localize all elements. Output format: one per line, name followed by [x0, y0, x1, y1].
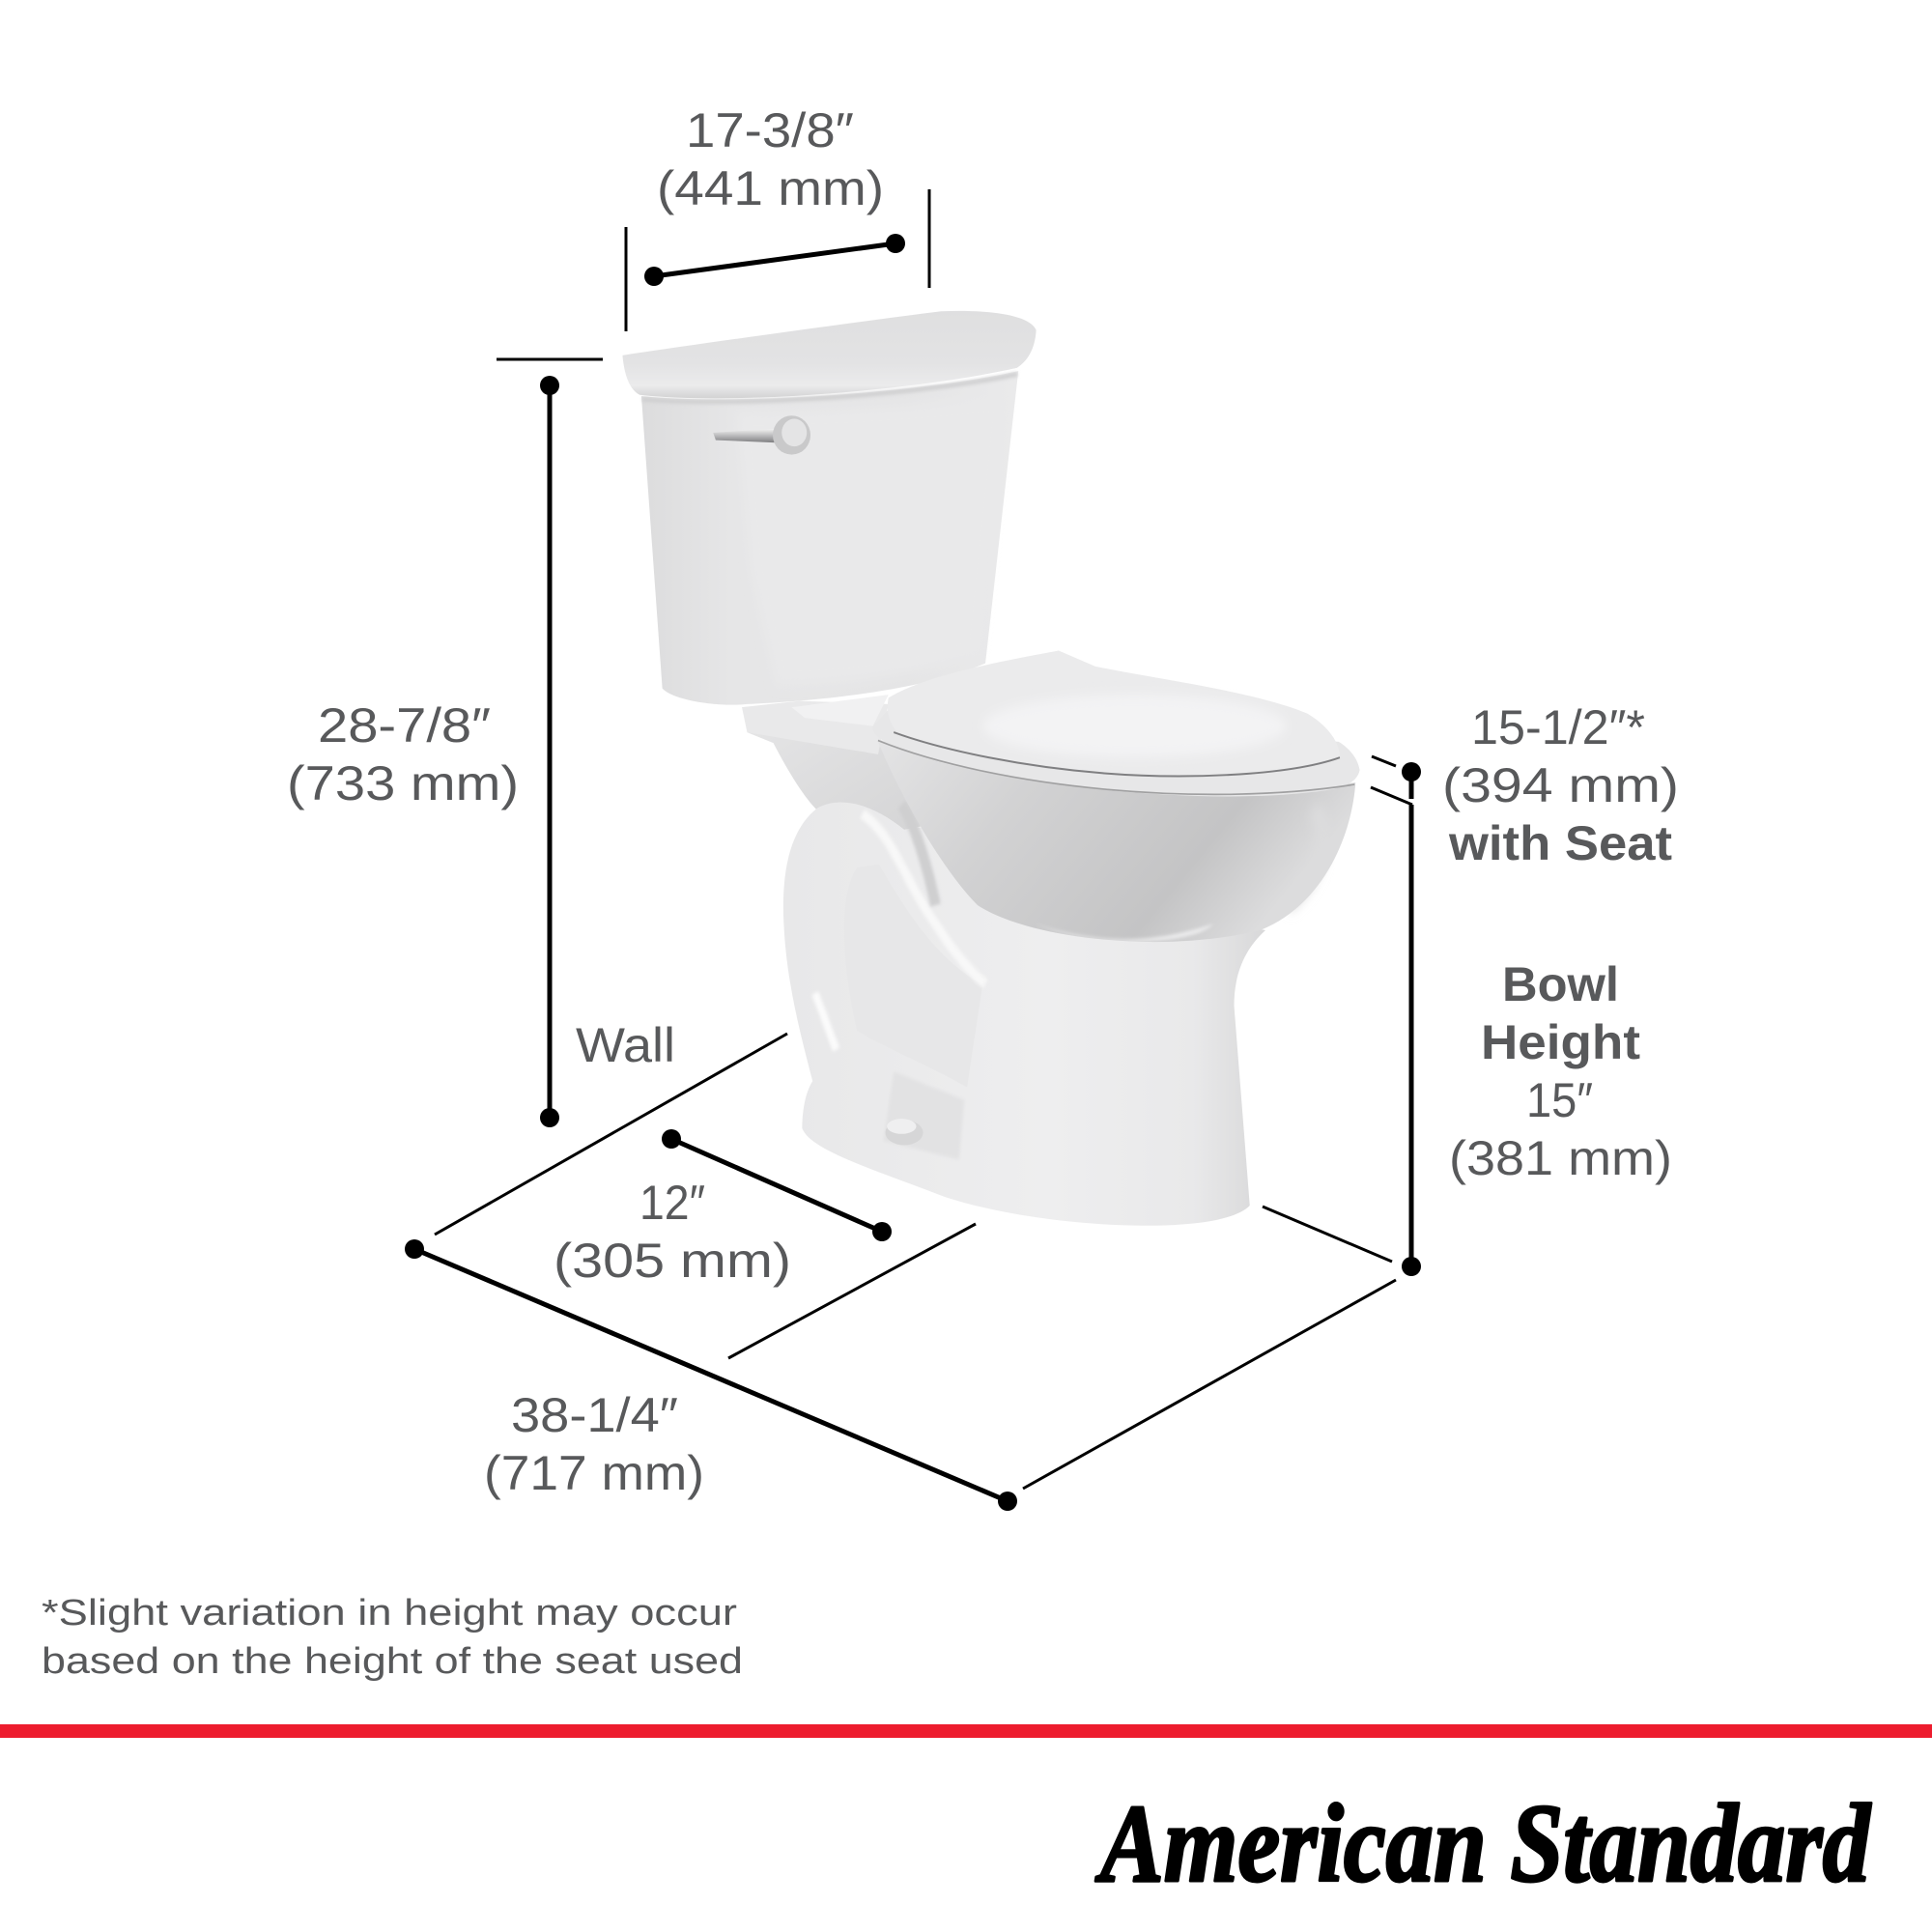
dimension: tank width 17-3/8	[626, 189, 929, 331]
label: tank width: (441 mm)	[657, 161, 884, 215]
label: overall height	[287, 698, 519, 810]
label: bowl height: 15″	[1526, 1073, 1593, 1127]
toilet seat	[872, 704, 1360, 796]
label: bowl height: (381 mm)	[1449, 1131, 1672, 1185]
dimension: overall height 28-7/8	[497, 359, 603, 1127]
flush lever	[713, 415, 810, 455]
floor guide lines	[435, 1034, 1396, 1489]
dimension: depth 38-1/4	[405, 1239, 1017, 1511]
tank lid	[622, 311, 1037, 398]
tank-to-bowl connector	[792, 695, 889, 726]
footnote: based on the height of the seat used	[42, 1641, 743, 1682]
label: height with seat: with Seat	[1448, 816, 1672, 870]
label: bowl height	[1449, 957, 1672, 1185]
label: height with seat	[1442, 700, 1679, 870]
label: depth: 38-1/4″	[511, 1388, 678, 1442]
label: rough-in: (305 mm)	[554, 1234, 791, 1288]
label: overall height: 28-7/8″	[318, 698, 491, 753]
label: height with seat: (394 mm)	[1442, 758, 1679, 812]
label: wall: Wall	[576, 1018, 675, 1072]
dimension: rough-in 12	[662, 1129, 892, 1241]
label: depth	[484, 1388, 704, 1500]
label: rough-in: 12″	[639, 1176, 705, 1230]
label: height with seat: 15-1/2″*	[1471, 700, 1645, 754]
toilet bowl	[878, 739, 1355, 942]
tank	[641, 371, 1018, 705]
footnote	[42, 1593, 743, 1682]
red divider bar	[0, 1724, 1932, 1738]
toilet pedestal base	[742, 701, 1265, 1226]
label: tank width	[657, 103, 884, 215]
label: depth: (717 mm)	[484, 1446, 704, 1500]
label: rough-in	[554, 1176, 791, 1288]
dimension: seat and bowl height	[1371, 756, 1421, 1276]
label: bowl height: Height	[1481, 1015, 1640, 1069]
label: tank width: 17-3/8″	[686, 103, 854, 157]
label: bowl height: Bowl	[1502, 957, 1619, 1011]
footnote: *Slight variation in height may occur	[42, 1593, 737, 1634]
toilet illustration	[622, 311, 1360, 1226]
label: overall height: (733 mm)	[287, 756, 519, 810]
toilet lid	[888, 651, 1340, 776]
